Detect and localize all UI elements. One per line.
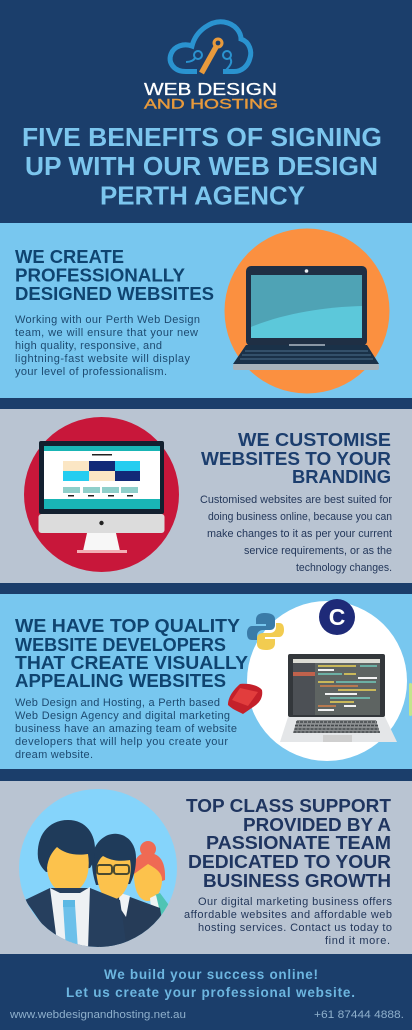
text block: your level of professionalism. [15, 366, 167, 378]
logo text: WEB DESIGN [144, 79, 277, 99]
callout [66, 967, 355, 1000]
text block: high quality, responsive, and [15, 340, 162, 352]
icon: laptop with code [280, 654, 397, 742]
heading [15, 615, 249, 691]
text block: Web Design and Hosting, a Perth based [15, 697, 220, 709]
heading: TOP CLASS SUPPORT [186, 795, 392, 816]
heading: WEBSITE DEVELOPERS [15, 634, 226, 655]
heading: THAT CREATE VISUALLY [15, 652, 249, 673]
text block: technology changes. [296, 562, 392, 574]
icon: white circle [247, 601, 407, 761]
text block: Web Design Agency and digital marketing [15, 710, 230, 722]
text block: dream website. [15, 749, 93, 761]
text block: business have an amazing team of website [15, 723, 237, 735]
icon: team of three people [19, 789, 177, 950]
callout: Let us create your professional website. [66, 985, 355, 1000]
heading: PROFESSIONALLY [15, 264, 186, 286]
heading: WE CUSTOMISE [238, 429, 391, 450]
man with glasses [92, 834, 162, 950]
woman [134, 841, 171, 920]
heading: DESIGNED WEBSITES [15, 283, 214, 304]
icon: ruby gem [228, 684, 262, 714]
heading [15, 246, 214, 304]
icon: cloud [170, 22, 251, 73]
heading: APPEALING WEBSITES [15, 670, 226, 691]
man in front [25, 820, 127, 950]
text block: Customised websites are best suited for [200, 494, 392, 506]
callout: We build your success online! [104, 967, 318, 982]
title: PERTH AGENCY [100, 182, 305, 210]
heading [201, 429, 391, 487]
footer [9, 967, 404, 1021]
text block: developers that will help you create your [15, 736, 228, 748]
panel: top quality website developers [0, 594, 412, 769]
text block: service requirements, or as the [244, 545, 392, 557]
text block: make changes to it as per your current [207, 528, 392, 540]
logo text: AND HOSTING [144, 96, 278, 112]
text block: doing business online, because you can [208, 511, 392, 523]
title: UP WITH OUR WEB DESIGN [25, 153, 378, 181]
title [22, 124, 382, 210]
icon: C language badge [319, 599, 355, 635]
heading: PROVIDED BY A [243, 814, 391, 835]
text block: affordable websites and affordable web [184, 909, 392, 921]
icon: laptop on orange circle [224, 228, 390, 394]
heading: WE HAVE TOP QUALITY [15, 615, 241, 636]
logo [144, 22, 278, 112]
icon: desktop monitor on red circle [24, 417, 179, 572]
heading: BUSINESS GROWTH [203, 870, 391, 891]
logo text [144, 79, 278, 112]
title: FIVE BENEFITS OF SIGNING [22, 124, 382, 152]
phone number: +61 87444 4888. [314, 1009, 404, 1021]
panel: professionally designed websites [0, 223, 412, 398]
heading: WE CREATE [15, 246, 124, 267]
panel: customise websites to branding [0, 409, 412, 583]
heading: BRANDING [292, 466, 391, 487]
text block [15, 697, 237, 761]
text block: Our digital marketing business offers [198, 896, 392, 908]
text block: team, we will ensure that your new [15, 327, 198, 339]
icon: python logo [247, 613, 284, 650]
text block [200, 494, 392, 574]
text block: hosting services. Contact us today to [198, 922, 392, 934]
heading: DEDICATED TO YOUR [188, 851, 391, 872]
panel: top class support [0, 781, 412, 954]
text block: find it more. [325, 935, 390, 947]
icon: C language badge: C [329, 604, 345, 630]
icon: green shape at edge [409, 683, 412, 716]
website address: www.webdesignandhosting.net.au [9, 1009, 186, 1021]
heading: PASSIONATE TEAM [206, 832, 391, 853]
text block [15, 314, 200, 378]
heading [186, 795, 392, 891]
text block [184, 896, 392, 947]
text block: lightning-fast website will display [15, 353, 190, 365]
text block: Working with our Perth Web Design [15, 314, 200, 326]
heading: WEBSITES TO YOUR [201, 448, 391, 469]
